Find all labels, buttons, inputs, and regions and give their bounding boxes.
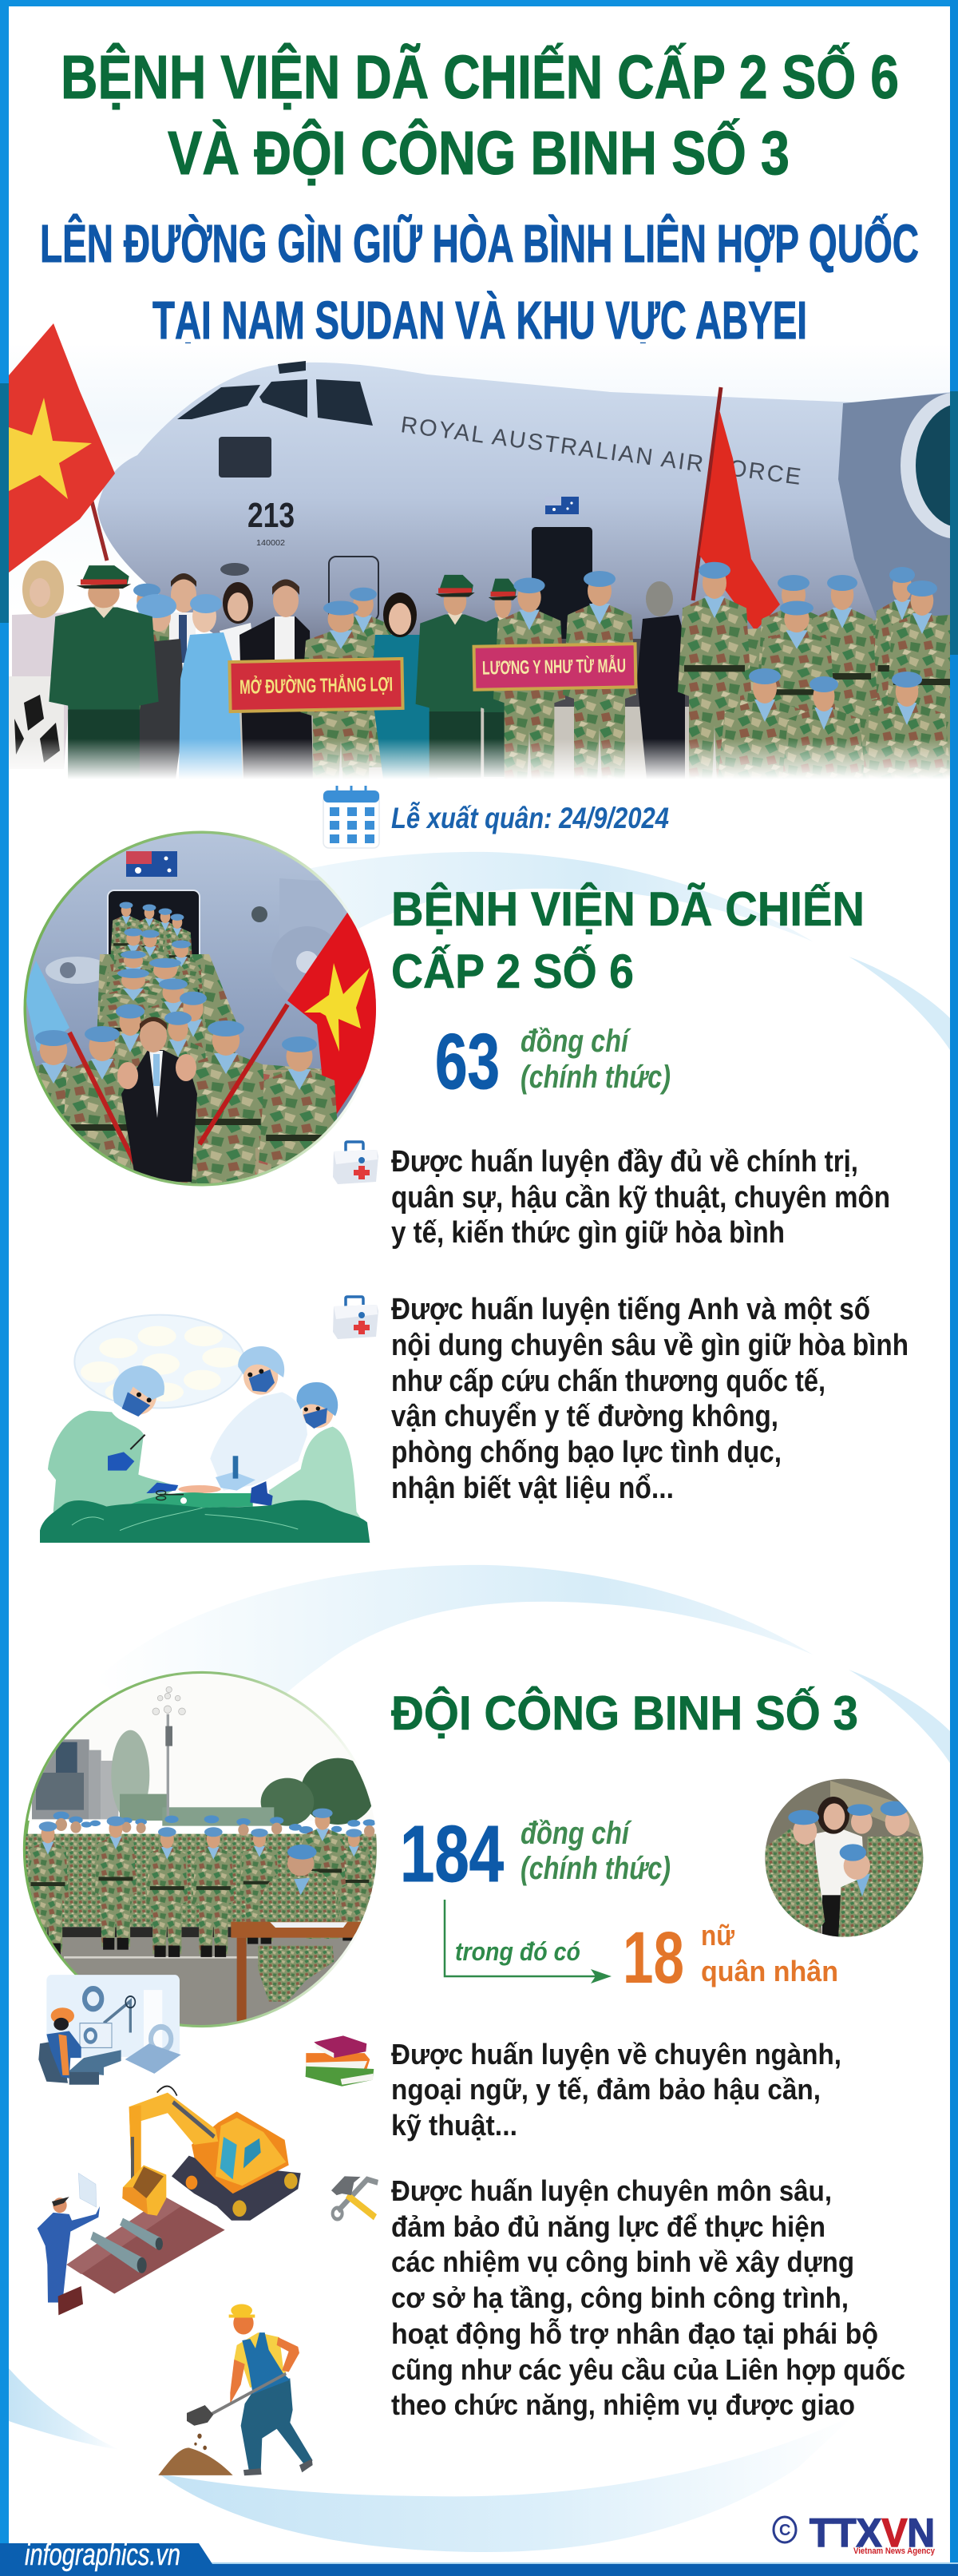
australian flag [126,851,177,877]
stat: 184 officers: 184 [400,1809,504,1899]
patient and drape [40,1481,370,1543]
door [108,890,200,964]
person: soldier A [493,578,565,785]
kneeling soldiers [717,668,952,796]
icon: calendar [323,786,379,848]
TTXVN logo: Vietnam News Agency [853,2546,936,2556]
text block: engineer training 2: Được huấn luyện chuyên môn sâu, [391,2174,832,2207]
person: blond woman [9,561,70,769]
person: man in black suit [240,580,313,779]
text block: engineer training 1 [391,2038,841,2142]
text block: engineer training 2: hoạt động hỗ trợ nhân đạo tại phái bộ [391,2317,878,2350]
ground [554,639,689,707]
text block: engineer training 2: đảm bảo đủ năng lực để thực hiện [391,2210,825,2243]
icon: books [306,2035,374,2087]
stat: 18 female soldiers [623,1917,838,1999]
illustration: engineer at control desk [38,1975,181,2085]
trees [111,1730,375,1826]
background swoosh: section 1 [96,852,950,1062]
illustration: worker with shovel [158,2305,313,2475]
flag red pole left [69,1032,137,1168]
text block: hospital training 2: phòng chống bạo lực tình dục, [391,1436,782,1469]
surgeon right [269,1382,362,1520]
person: soldier B [563,571,636,783]
stat: 63 officers [435,1017,671,1105]
pipes [90,2218,163,2273]
title: VÀ ĐỘI CÔNG BINH SỐ 3 [168,118,790,188]
banner: Lương y như từ mẫu: LƯƠNG Y NHƯ TỪ MẪU [482,653,626,680]
aircraft lettering: ROYAL AUSTRALIAN AIR FORCE [399,412,802,490]
illustration: excavator and pipes [38,2087,301,2315]
excavator bucket [122,2166,166,2216]
lamp post [152,1686,185,1821]
tracks [172,2156,301,2221]
section heading: field hospital: BỆNH VIỆN DÃ CHIẾN [391,882,865,936]
text block: engineer training 1: Được huấn luyện về chuyên ngành, [391,2038,841,2071]
stat: 184 officers: (chính thức) [521,1851,671,1886]
person: officer left [49,565,159,779]
surgeon left [48,1365,178,1512]
section heading: engineer unit: ĐỘI CÔNG BINH SỐ 3 [391,1686,858,1740]
excavator arm [129,2087,218,2184]
crowd back rows [24,1812,381,1937]
person: woman in dark dress [137,594,183,778]
TTXVN logo: C [779,2522,790,2539]
section heading: field hospital [391,882,865,998]
tall soldier [678,562,751,784]
ground plate [66,2197,225,2293]
person: man in dark suit from behind [637,581,685,779]
footer bar [0,2538,958,2576]
text block: hospital training 1: quân sự, hậu cần kỹ thuật, chuyên môn [391,1181,890,1215]
soldiers front row [11,1020,268,1242]
crowd fill right [740,615,950,766]
text block: engineer training 2: cũng như các yêu cầu của Liên hợp quốc [391,2353,905,2386]
person: woman black hair [220,582,255,663]
illustration: surgeons [40,1315,370,1543]
text block: hospital training 2: Được huấn luyện tiếng Anh và một số [391,1293,870,1326]
section heading: field hospital: CẤP 2 SỐ 6 [391,945,634,998]
icon: hammer and wrench [331,2176,378,2219]
person: woman teal ao dai [374,592,430,778]
text block: hospital training 2: nhận biết vật liệu nổ... [391,1472,674,1505]
soldiers back row [758,575,819,669]
stat: 18 female soldiers: quân nhân [701,1955,838,1987]
soldier [875,567,916,709]
surgeon centre [210,1346,307,1491]
UN flag [24,961,69,1052]
table and signing soldier [231,1845,362,2023]
background swoosh: bottom [9,2368,855,2552]
text block: hospital training 2 [391,1293,909,1505]
banner: Mở đường thắng lợi: MỞ ĐƯỜNG THẮNG LỢI [240,672,393,699]
stat: 63 officers: 63 [435,1017,500,1105]
serial number: 140002 [256,539,285,548]
tail number: 213 [247,496,295,535]
vietnam flag [200,910,383,1144]
hero photo: aircraft and delegation [0,323,958,796]
stat: 18 female soldiers: nữ [701,1919,735,1952]
soldiers front row [27,1809,372,1957]
stat: 184 officers [400,1809,671,1899]
person: man with glasses [169,573,196,668]
soldiers on stairs [97,902,224,1195]
text block: hospital training 2: như cấp cứu chấn thương quốc tế, [391,1365,825,1398]
stat: 18 female soldiers: 18 [623,1917,684,1999]
shovel [210,2374,286,2415]
australian flag [545,497,579,514]
red flag behind delegation [693,387,780,631]
text block: engineer training 2: theo chức năng, nhiệm vụ được giao [391,2388,855,2421]
subtitle [40,213,919,351]
aircraft fuselage [97,363,950,663]
legs [241,2378,313,2471]
stat: 63 officers: đồng chí [521,1024,631,1059]
person: woman light blue ao dai [179,594,243,779]
date line: Lễ xuất quân: 24/9/2024 [391,802,669,834]
photo circle: hospital team at aircraft door [11,830,383,1248]
photo circle: engineer unit at ceremony [24,1671,381,2034]
soldiers crowd mass [36,954,335,1190]
text block: engineer training 1: ngoại ngữ, y tế, đảm bảo hậu cần, [391,2073,821,2106]
surgical lamp [74,1315,245,1408]
aircraft door [532,527,592,647]
person: soldier behind [342,588,391,767]
excavator body [192,2111,289,2194]
vietnam flag left [9,323,115,573]
title [61,42,899,188]
text block: engineer training 1: kỹ thuật... [391,2109,517,2142]
footer bar: infographics.vn [25,2538,180,2572]
person: soldier holding banner [300,600,375,776]
supervising man [38,2173,100,2315]
banner: Mở đường thắng lợi [229,659,403,711]
text block: hospital training 1: Được huấn luyện đầy đủ về chính trị, [391,1145,858,1179]
text block: hospital training 2: vận chuyển y tế đường không, [391,1400,778,1433]
cockpit windows [177,361,373,576]
soldier [888,581,950,730]
smiling woman soldier [762,600,835,712]
arrow: 184 to 18 [445,1900,612,1984]
soil pile [158,2447,233,2475]
text block: hospital training 1: y tế, kiến thức gìn giữ hòa bình [391,1216,785,1250]
banner: Lương y như từ mẫu [474,644,635,690]
person: UN beret man [133,583,169,711]
stat: 63 officers: (chính thức) [521,1060,671,1095]
small photo circle: women soldiers [764,1778,926,1940]
text block: engineer training 2 [391,2174,905,2421]
text block: engineer training 2: cơ sở hạ tầng, công binh công trình, [391,2281,849,2314]
torso [234,2332,286,2388]
ground [24,1927,381,2034]
background swoosh: section 2 [96,1565,950,1775]
soldier [811,575,877,763]
head and helmet [233,2312,254,2334]
soldier right [259,1036,340,1248]
icon: medical kit 2 [333,1297,378,1339]
TTXVN logo: TTXVN [810,2511,935,2555]
aircraft engine [838,393,950,617]
stat: 184 officers: đồng chí [521,1816,632,1851]
building [32,1739,118,1819]
hatch outline [329,557,378,620]
text block: engineer training 2: các nhiệm vụ công binh về xây dựng [391,2245,854,2278]
label: including: trong đó có [455,1937,580,1966]
arms [230,2360,245,2404]
person: officer middle [415,575,486,778]
icon: medical kit 1 [333,1142,378,1184]
text block: hospital training 1 [391,1145,890,1250]
person: officer behind [481,578,517,777]
man in suit [117,1017,197,1182]
